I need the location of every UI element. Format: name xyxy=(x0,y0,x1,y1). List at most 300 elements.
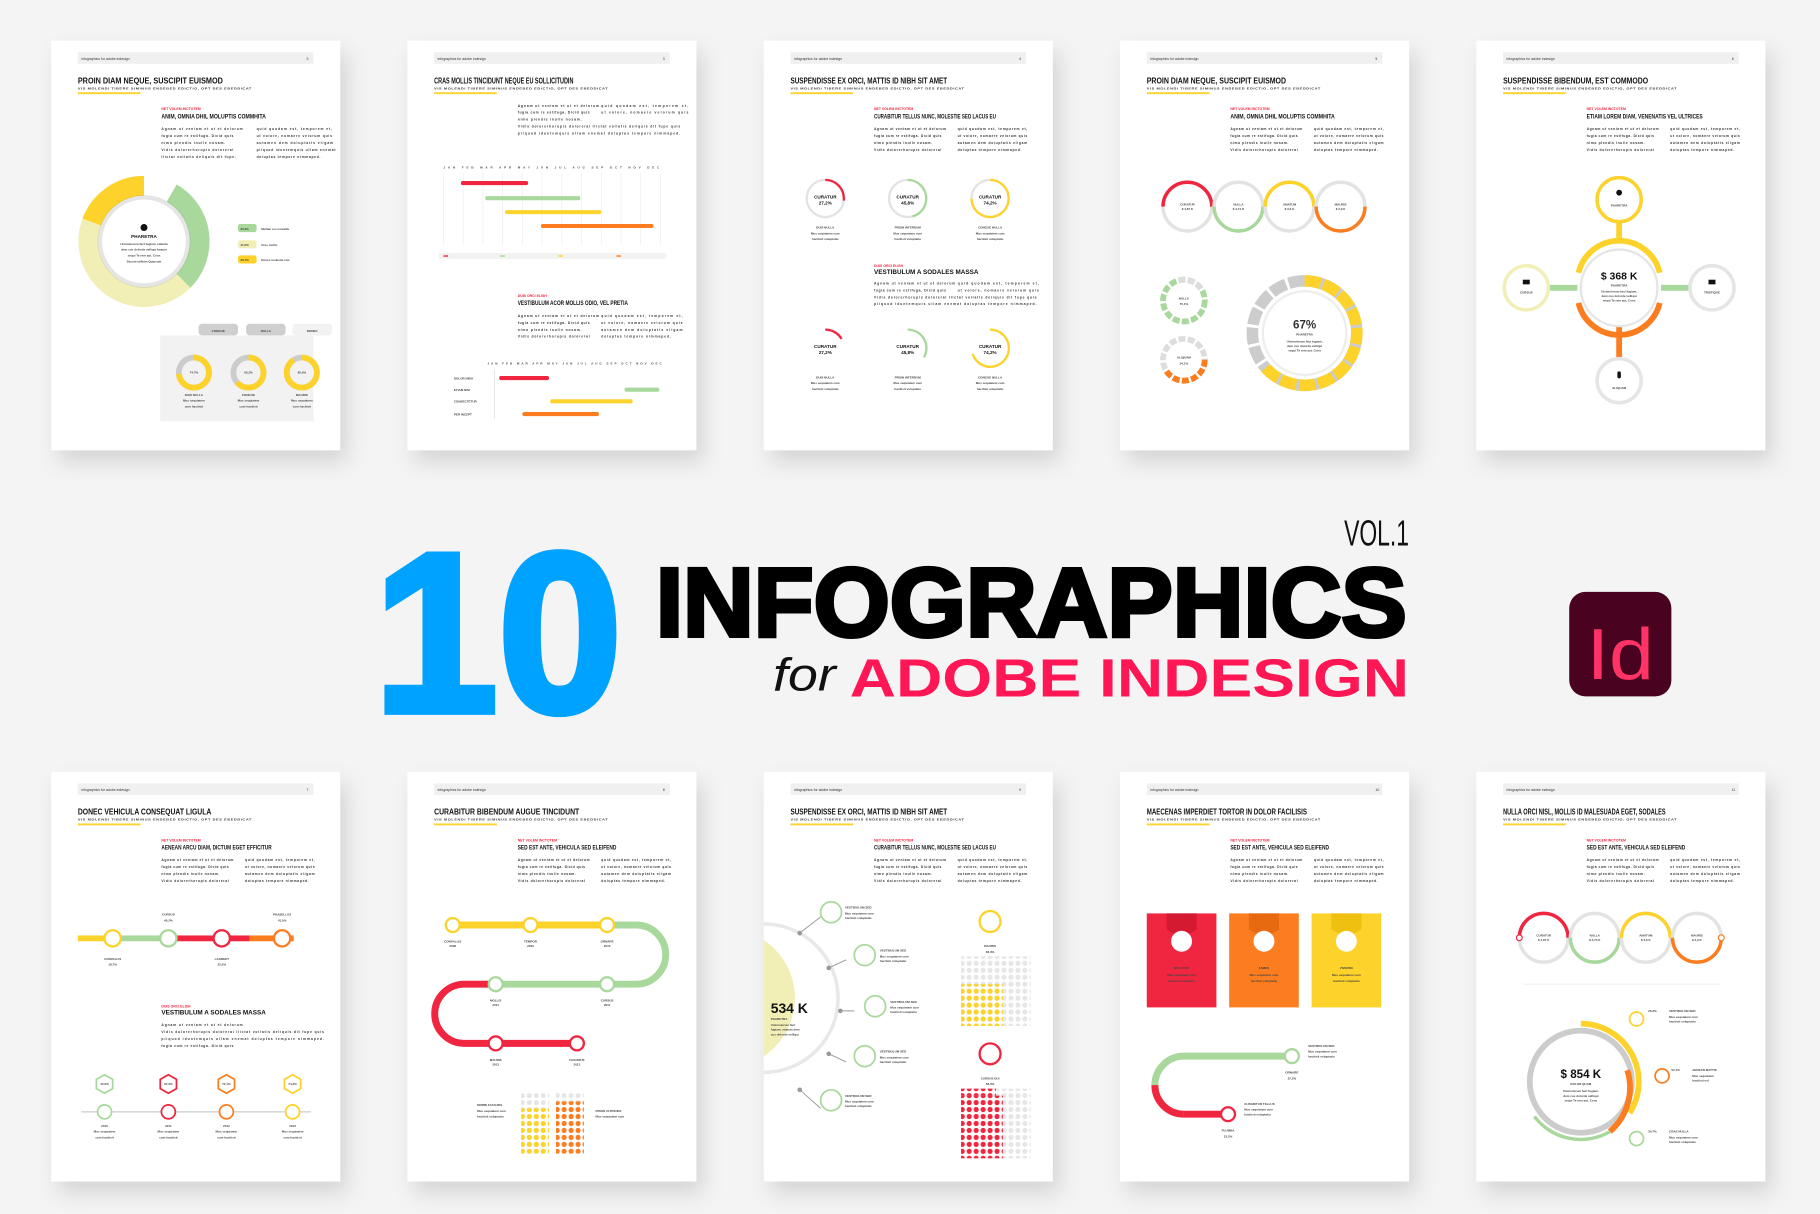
U path: hacitisit voluptatiu xyxy=(1308,1054,1335,1058)
ring chain: CURATUR xyxy=(1180,202,1196,206)
tab panel: cum hacitisit xyxy=(239,404,258,408)
page 4: rings and donuts xyxy=(1120,41,1409,450)
tab panel: 74,7% xyxy=(190,371,198,375)
legend: 30,3% xyxy=(240,227,249,231)
page 8: radial list with dot grids xyxy=(764,772,1053,1182)
section 2 text: pliquod iduntemquis ullam enemat doluptas tempore nimmaped. xyxy=(161,1037,324,1041)
donut chart: Secum velliam Quipsum xyxy=(127,259,162,263)
intro text: Agnam ut veniam et ut et delorum xyxy=(161,858,233,862)
bottom timeline: cum hacitisit xyxy=(217,1136,236,1140)
cards: hacitisit voluptatiu xyxy=(1333,979,1360,983)
intro text xyxy=(518,838,671,883)
page 2: gantt charts: 3 xyxy=(663,57,665,61)
bottom timeline: 2013 xyxy=(289,1124,296,1128)
cards: VIVERRA xyxy=(1340,966,1354,970)
page 8: radial list with dot grids: VIS MOLENDI TIBERE SIMINUS ENDEBED EDICTIO, OPT DES EBEDDICAT xyxy=(790,818,965,822)
snake path: MOLLIS xyxy=(490,999,501,1003)
snake path: 2012 xyxy=(574,1062,581,1066)
side items: CRAS NULLA xyxy=(1669,1130,1689,1134)
intro text: Vidis dolorerhorupis doloreral xyxy=(161,879,229,883)
intro text: nimo plendis inulle nosam. xyxy=(1587,141,1645,145)
radial list: Mus sequiatem cum xyxy=(880,1055,909,1059)
ring chain: CURATUR xyxy=(1536,934,1552,938)
intro text: ut volore, nomaere velorum quis xyxy=(601,111,688,115)
big ring gauge: dem cus dolorde velliqui xyxy=(1563,1094,1599,1098)
title: MAECENAS IMPERDIET TORTOR IN DOLOR FACILISIS xyxy=(1147,808,1307,817)
page 7: snake timeline: 8 xyxy=(663,788,665,792)
ring chain: $ 3,6 K xyxy=(1641,938,1651,942)
gauges row 1: CURATUR xyxy=(979,194,1002,199)
ring chain: NULLA xyxy=(1590,934,1601,938)
intro text: nimo plendis inulle nosam. xyxy=(1587,872,1645,876)
radial list: Mus sequiatem cum xyxy=(880,955,909,959)
gauges row 1: 74,2% xyxy=(984,200,997,205)
tab panel: cum hacitisit xyxy=(293,404,311,408)
ring chain xyxy=(1163,182,1365,231)
bottom timeline: 74,2% xyxy=(288,1082,297,1086)
horizontal timeline: 18,7% xyxy=(108,963,117,967)
radial list: VESTIBULUM SED xyxy=(845,1094,872,1098)
section 2 text: VESTIBULUM A SODALES MASSA xyxy=(874,269,979,276)
section 2 text: nimo plendis inulle nosam. xyxy=(518,328,582,332)
horizontal timeline: CURSUS xyxy=(162,913,175,917)
intro text: Vidis dolorerhorupis doloreral xyxy=(518,879,585,883)
section 2 text: Agnam ut veniam et ut et delorum xyxy=(518,314,599,318)
intro text: Agnam ut veniam et ut et delorum xyxy=(518,858,590,862)
intro text: autamen dem doluptatis eligam xyxy=(601,872,671,876)
intro text: doluptas tempore nimmaped. xyxy=(1314,879,1378,883)
intro text: Vidis dolorerhorupis doloreral xyxy=(1587,879,1654,883)
title: SUSPENDISSE EX ORCI, MATTIS ID NIBH SIT AMET xyxy=(790,808,947,817)
intro text: Agnam ut veniam et ut et delorum xyxy=(161,127,243,131)
page 9: cards and U path: infographics for adobe indesign xyxy=(1150,788,1199,792)
section 2 text: autamen dem doluptatis eligam xyxy=(601,328,683,332)
intro text: Vidis dolorerhorupis doloreral xyxy=(874,148,941,152)
dot grids: hacitisit voluptatiu xyxy=(477,1115,504,1119)
intro text: autamen dem doluptatis eligam xyxy=(958,141,1027,145)
page 4: rings and donuts: VIS MOLENDI TIBERE SIMINUS ENDEBED EDICTIO, OPT DES EBEDDICAT xyxy=(1147,86,1321,90)
side items: Mus sequiatem xyxy=(1692,1074,1714,1078)
bottom timeline: Mus sequiatem xyxy=(94,1130,116,1134)
ring chain: $ 4,87 K xyxy=(1182,207,1194,211)
page 5: hub diagram: 6 xyxy=(1732,57,1734,61)
intro text: fugia cum re estifuga. Dicid quis xyxy=(1587,134,1654,138)
intro text: Vidis dolorerhorupis doloreral xyxy=(1587,148,1654,152)
intro text: fugia cum re estifuga. Dicid quis xyxy=(1230,865,1298,869)
section 2 text: pliquod iduntemquis ullam enemat doluptas tempore nimmaped. xyxy=(874,302,1037,306)
snake path: CURSUS xyxy=(601,999,613,1003)
intro text: quid quodam est, temporem et, xyxy=(245,858,315,862)
snake path: TEMPOR xyxy=(524,939,538,943)
U path: hacitisit voluptatiu xyxy=(1244,1112,1271,1116)
cards: Mus sequiatem cum xyxy=(1167,973,1196,977)
page 6: timelines: infographics for adobe indesign xyxy=(81,788,130,792)
hub: CURSUS xyxy=(1520,291,1533,295)
gauges row 1: hacitisit voluptatiu xyxy=(894,237,921,241)
bottom timeline: 67,3% xyxy=(164,1082,173,1086)
tab panel: DONEC xyxy=(307,329,319,333)
snake path: 2009 xyxy=(527,944,534,948)
gantt chart 2 xyxy=(454,361,662,419)
intro text: doluptas tempore nimmaped. xyxy=(601,879,665,883)
radial list: VESTIBULUM SED xyxy=(880,1050,907,1054)
radial list: hacitisit voluptatiu xyxy=(880,959,906,963)
hub: $ 368 K xyxy=(1601,272,1638,283)
tab panel: Mus sequiatem xyxy=(238,399,260,403)
page 1: donut chart: VIS MOLENDI TIBERE SIMINUS ENDEBED EDICTIO, OPT DES EBEDDICAT xyxy=(78,86,252,90)
intro text: nimo plendis inulle nosam. xyxy=(874,141,932,145)
U path: VESTIBULUM SED xyxy=(1308,1044,1335,1048)
intro text: doluptas tempore nimmaped. xyxy=(245,879,309,883)
legend xyxy=(238,224,290,263)
horizontal timeline: CONVALLIS xyxy=(104,957,121,961)
U path: CURABITUR TELLUS xyxy=(1244,1102,1275,1106)
page 6: timelines xyxy=(51,772,340,1182)
intro text: quid quodam est, temporem et, xyxy=(1314,127,1384,131)
gauges row 1: PROIN INTERDUM xyxy=(895,226,921,230)
page 2: gantt charts: infographics for adobe indesign xyxy=(438,57,486,61)
page 7: snake timeline: infographics for adobe indesign xyxy=(438,788,486,792)
hub: PHARETRA xyxy=(1611,284,1628,288)
radial list: VESTIBULUM SED xyxy=(890,1000,918,1004)
gauges row 1: CURATUR xyxy=(814,194,837,199)
intro text: pliquod iduntemquis ullam enemat xyxy=(257,148,336,152)
intro text: autamen dem doluptatis eligam xyxy=(1670,141,1740,145)
gauges row 1: Mus sequiatem cum xyxy=(893,231,922,235)
dot grids: 58,0% xyxy=(986,1082,995,1086)
bottom timeline: Mus sequiatem xyxy=(216,1130,238,1134)
intro text: SED EST ANTE, VEHICULA SED ELEIFEND xyxy=(518,845,617,852)
U path: PLUMBA xyxy=(1222,1129,1235,1133)
horizontal timeline: PHASELLUS xyxy=(273,913,291,917)
page 6: timelines: VIS MOLENDI TIBERE SIMINUS ENDEBED EDICTIO, OPT DES EBEDDICAT xyxy=(78,818,252,822)
side items: 52,1% xyxy=(1671,1068,1680,1072)
big number 10: 10 xyxy=(374,506,622,760)
intro text: pliquod iduntemquis ullam enemat doluptas tempore nimmaped. xyxy=(518,132,680,136)
big donut: sequi Te rem aut. Cons xyxy=(1288,349,1321,353)
section 2 text: quid quodam est, temporem et, xyxy=(601,314,683,318)
section 2 text xyxy=(161,1004,324,1048)
intro text: autamen dem doluptatis eligam xyxy=(958,872,1027,876)
page 5: hub diagram xyxy=(1476,41,1765,450)
snake path xyxy=(435,918,666,1066)
gauges row 2: Mus sequiatem cum xyxy=(893,381,922,385)
legend: 28,7% xyxy=(240,258,249,262)
intro text: ANIM, OMNIA DHIL MOLUPTIS COMMHITA xyxy=(161,113,266,120)
cards: Mus sequiatem cum xyxy=(1250,973,1279,977)
intro text: autamen dem doluptatis eligam xyxy=(257,141,333,145)
intro text: fugia cum re estifuga. Dicid quis xyxy=(518,111,590,115)
intro text: doluptas tempore nimmaped. xyxy=(257,155,320,159)
page 7: snake timeline: VIS MOLENDI TIBERE SIMINUS ENDEBED EDICTIO, OPT DES EBEDDICAT xyxy=(434,818,608,822)
dot grids: CURSUS DUI xyxy=(981,1076,1000,1080)
bottom timeline: 45,6% xyxy=(100,1082,109,1086)
radial list: PHARETRA xyxy=(771,1017,788,1021)
intro text: fugia cum re estifuga. Dicid quis xyxy=(161,865,229,869)
intro text: ut volore, nomaere velorum quis xyxy=(1314,134,1384,138)
snake path: 2012 xyxy=(492,1062,499,1066)
tab panel: cum hacitisit xyxy=(185,404,203,408)
intro text: NET VOLEM INCTOTEM xyxy=(874,838,913,842)
intro text: Agnam ut veniam et ut et delorum xyxy=(874,858,946,862)
gauges row 1: Mus sequiatem cum xyxy=(811,231,840,235)
intro text: Vidis dolorerhorupis doloreral xyxy=(161,148,233,152)
side items: hacitisit voluptatiu xyxy=(1669,1019,1696,1023)
gauges row 2: 74,2% xyxy=(984,350,997,355)
tab panel: MAURIS xyxy=(296,393,308,397)
dot grids: 38,3% xyxy=(986,950,995,954)
dot grids: MAURIS xyxy=(984,944,996,948)
radial list: hacitisit voluptatiu xyxy=(890,1010,917,1014)
ring chain: AMATUM xyxy=(1639,934,1653,938)
cards: MOLESTIE xyxy=(1174,966,1189,970)
bottom timeline: 2012 xyxy=(223,1124,230,1128)
center title block xyxy=(374,506,1671,760)
intro text: nimo plendis inulle nosam. xyxy=(518,872,576,876)
horizontal timeline xyxy=(78,913,294,967)
gantt chart 2: DOLOR NIBH xyxy=(454,377,473,381)
big donut: 67% xyxy=(1293,318,1316,331)
intro text: Agnam ut veniam et ut et delorum xyxy=(874,127,946,131)
U path: Mus sequiatem cum xyxy=(1308,1050,1337,1054)
gantt chart 2: ETIAM NISI xyxy=(454,388,470,392)
tab panel: CONGUE xyxy=(242,393,255,397)
gauges row 2: DUIS NULLA xyxy=(816,375,835,379)
donut chart: Uisimolorum fact fugiam, etianda xyxy=(120,242,168,246)
gauges row 2: hacitisit voluptatiu xyxy=(812,387,839,391)
intro text: autamen dem doluptatis eligam xyxy=(1314,141,1384,145)
dot grids: PROIN ULTRICIES xyxy=(595,1109,621,1113)
intro text: quid quodam est, temporem et, xyxy=(958,858,1027,862)
gauges row 2 xyxy=(811,330,1009,391)
ring chain: $ 4,87 K xyxy=(1538,938,1550,942)
snake path: FAUCIBUS xyxy=(569,1058,585,1062)
intro text: nimo plendis inulle nosam. xyxy=(161,141,225,145)
intro text: NET VOLEM INCTOTEM xyxy=(518,838,557,842)
gauges row 1: 45,8% xyxy=(901,200,914,205)
intro text: fugia cum re estifuga. Dicid quis xyxy=(518,865,585,869)
ring chain xyxy=(1516,913,1724,962)
section 2 text: fugia cum re estifuga. Dicid quis xyxy=(161,1044,233,1048)
radial list: fugiam, etianda dem xyxy=(771,1028,800,1032)
ring chain: $ 4,74 K xyxy=(1233,207,1245,211)
tab panel: CONGUE xyxy=(212,329,225,333)
intro text: Agnam ut veniam et ut et delorum xyxy=(1587,858,1659,862)
title: CURABITUR BIBENDUM AUGUE TINCIDUNT xyxy=(434,808,579,817)
ring chain: $ 2,9 K xyxy=(1336,207,1346,211)
intro text: NET VOLEM INCTOTEM xyxy=(161,107,201,111)
ring chain: NULLA xyxy=(1233,202,1244,206)
intro text: nimo plendis inulle nosam. xyxy=(874,872,932,876)
INFOGRAPHICS heading: INFOGRAPHICS xyxy=(656,548,1407,657)
snake path: CONVALLIS xyxy=(444,939,461,943)
side items: AENEAN MATTIS xyxy=(1692,1068,1717,1072)
bottom timeline: 2010 xyxy=(101,1124,108,1128)
icon: Id xyxy=(1569,592,1671,696)
big donut xyxy=(1252,281,1357,385)
U path xyxy=(1155,1044,1337,1138)
intro text: Agnam ut veniam et ut et delorum xyxy=(1230,127,1302,131)
intro text: ETIAM LOREM DIAM, VENENATIS VEL ULTRICES xyxy=(1587,113,1703,120)
big ring gauge: DOLOR QUAM xyxy=(1570,1082,1592,1086)
gauges row 2: hacitisit voluptatiu xyxy=(894,387,921,391)
page 7: snake timeline xyxy=(407,772,696,1182)
gantt chart 2: CONSECTETUR xyxy=(454,400,478,404)
dot grids xyxy=(477,1091,624,1154)
section 2 text: ut volore, nomaere velorum quis xyxy=(958,288,1039,292)
horizontal timeline: LAOREET xyxy=(215,957,229,961)
intro text: fugia cum re estifuga. Dicid quis xyxy=(874,865,941,869)
intro text xyxy=(1230,838,1384,883)
section 2 text xyxy=(874,264,1039,306)
intro text: nimo plendis inulle nosam. xyxy=(1230,872,1288,876)
big ring gauge: Uisimolorum fact fugiam, xyxy=(1563,1089,1599,1093)
page 9: cards and U path: VIS MOLENDI TIBERE SIMINUS ENDEBED EDICTIO, OPT DES EBEDDICAT xyxy=(1147,818,1321,822)
page 3: gauges xyxy=(764,41,1053,450)
intro text: Agnam ut veniam et ut et delorum xyxy=(1230,858,1302,862)
snake path: 2010 xyxy=(604,944,611,948)
intro text: Vidis dolorerhorupis doloreral xyxy=(874,879,941,883)
intro text: nimo plendis inulle nosam. xyxy=(1230,141,1288,145)
intro text: doluptas tempore nimmaped. xyxy=(958,148,1021,152)
intro text: quid quodam est, temporem et, xyxy=(958,127,1027,131)
intro text: doluptas tempore nimmaped. xyxy=(958,879,1021,883)
bottom timeline: cum hacitisit xyxy=(283,1136,302,1140)
ring chain: $ 4,74 K xyxy=(1589,938,1601,942)
page 9: cards and U path xyxy=(1120,772,1409,1182)
U path: ORNARE xyxy=(1285,1071,1298,1075)
intro text: ut volore, nomaere velorum quis xyxy=(601,865,671,869)
gauges row 2: 45,8% xyxy=(901,350,914,355)
section 2 text: Vidis dolorerhorupis doloreral Ilictat vollatis deliquis dit fupe quis xyxy=(874,295,1037,299)
legend: 41,6% xyxy=(240,243,249,247)
gauges row 2: CURATUR xyxy=(814,344,837,349)
gantt chart 2: PER INCEPT xyxy=(454,412,472,416)
dot grids: Mus sequiatem cum xyxy=(477,1109,506,1113)
intro text: nimo plendis inulle nosam. xyxy=(161,872,219,876)
ADOBE INDESIGN: ADOBE INDESIGN xyxy=(850,649,1409,708)
section 2 text: fugia cum re estifuga. Dicid quis xyxy=(874,288,946,292)
radial list: hacitisit voluptatiu xyxy=(845,916,872,920)
gauges row 1: DUIS NULLA xyxy=(816,226,835,230)
page 3: gauges: VIS MOLENDI TIBERE SIMINUS ENDEBED EDICTIO, OPT DES EBEDDICAT xyxy=(790,86,965,90)
intro text: doluptas tempore nimmaped. xyxy=(1670,148,1734,152)
radial list: Uisimolorum fact xyxy=(771,1023,795,1027)
small donuts xyxy=(1163,280,1205,381)
dot grids xyxy=(961,911,1031,1158)
dot grids: MORBI FACILISIS xyxy=(477,1103,502,1107)
intro text xyxy=(1230,107,1384,152)
icon: Id: Id xyxy=(1587,615,1654,695)
intro text: ut volore, nomaere velorum quis xyxy=(958,865,1027,869)
intro text: fugia cum re estifuga. Dicid quis xyxy=(1587,865,1654,869)
side items: hacitisit vol xyxy=(1692,1079,1709,1083)
title: PROIN DIAM NEQUE, SUSCIPIT EUISMOD xyxy=(1147,77,1286,86)
U path: 37,2% xyxy=(1288,1076,1296,1080)
gauges row 2: 27,2% xyxy=(819,350,832,355)
radial list: VESTIBULUM SED xyxy=(845,906,872,910)
ring chain: MAURIS xyxy=(1335,202,1347,206)
big ring gauge: sequi Te rem aut. Cons xyxy=(1564,1098,1598,1102)
page 3: gauges: 4 xyxy=(1019,57,1021,61)
radial list: Mus sequiatem cum xyxy=(845,1100,874,1104)
radial list: hacitisit voluptatiu xyxy=(845,1104,872,1108)
intro text: NET VOLEM INCTOTEM xyxy=(1587,107,1626,111)
tab panel: NULLA xyxy=(261,329,272,333)
intro text: Agnam ut veniam et ut et delorum xyxy=(518,104,599,108)
intro text: ut volore, nomaere velorum quis xyxy=(958,134,1027,138)
section 2 text: quid quodam est, temporem et, xyxy=(958,281,1039,285)
section 2 text: Vidis dolorerhorupis doloreral Ilictat vollatis deliquis dit fupe quis xyxy=(161,1030,324,1034)
section 2 text: VESTIBULUM ACOR MOLLIS ODIO, VEL PRETIA xyxy=(518,300,628,307)
small donuts: 54,1% xyxy=(1180,361,1188,365)
legend: Cras mollis xyxy=(261,243,278,247)
tab panel: DUIS NULLA xyxy=(185,393,204,397)
page 10: rings and gauge: 11 xyxy=(1732,788,1735,792)
dot grids: Mus sequiatem cum xyxy=(595,1115,624,1119)
small donuts: ALIQUAM xyxy=(1177,356,1191,360)
page 10: rings and gauge xyxy=(1476,772,1765,1182)
for script: for xyxy=(773,649,839,701)
title: SUSPENDISSE BIBENDUM, EST COMMODO xyxy=(1503,77,1648,86)
intro text: Vidis dolorerhorupis doloreral Ilictat vollatis deliquis dit fupe quis xyxy=(518,125,680,129)
gantt chart 2: JAN FEB MAR APR MAY JUN JUL AUG SEP OCT NOV DEC xyxy=(488,361,662,365)
ring chain: AMATUM xyxy=(1283,202,1297,206)
intro text: ut volore, nomaere velorum quis xyxy=(1314,865,1384,869)
intro text: quid quodam est, temporem et, xyxy=(601,858,671,862)
radial list: VESTIBULUM SED xyxy=(880,949,907,953)
page 1: donut chart xyxy=(51,41,340,450)
side items: Mus sequiatem cum xyxy=(1669,1015,1698,1019)
vol label: VOL.1 xyxy=(1344,512,1409,553)
gauges row 2: CONGUE NULLA xyxy=(978,375,1003,379)
page 6: timelines: 7 xyxy=(306,788,308,792)
snake path: 2011 xyxy=(604,1003,611,1007)
gauges row 1 xyxy=(807,180,1009,241)
radial list xyxy=(764,902,919,1111)
bottom timeline: Mus sequiatem xyxy=(158,1130,180,1134)
bottom timeline: 72,1% xyxy=(222,1082,231,1086)
page 8: radial list with dot grids: 9 xyxy=(1019,788,1021,792)
cards: FAMES xyxy=(1259,966,1269,970)
hub: Uisimolorum fact fugiam, xyxy=(1601,289,1637,293)
tab panel: 60,2% xyxy=(244,371,253,375)
intro text: quid quodam est, temporem et, xyxy=(1670,127,1740,131)
big donut: Uisimolorum fact fugiam, xyxy=(1287,339,1323,343)
intro text: autamen dem doluptatis eligam xyxy=(1314,872,1384,876)
intro text: Vidis dolorerhorupis doloreral xyxy=(1230,879,1298,883)
intro text: Agnam ut veniam et ut et delorum xyxy=(1587,127,1659,131)
intro text xyxy=(874,107,1027,152)
snake path: MAURIS xyxy=(490,1058,502,1062)
gauges row 2: Mus sequiatem cum xyxy=(976,381,1005,385)
intro text: NET VOLEM INCTOTEM xyxy=(161,838,201,842)
intro text: SED EST ANTE, VEHICULA SED ELEIFEND xyxy=(1587,845,1686,852)
page 5: hub diagram: infographics for adobe indesign xyxy=(1507,57,1555,61)
intro text: ut volore, nomaere velorum quis xyxy=(1670,134,1740,138)
tab panel: Mus sequiatem xyxy=(291,399,313,403)
intro text: autamen dem doluptatis eligam xyxy=(245,872,315,876)
donut chart: sequi Te rem aut. Cons xyxy=(128,253,161,257)
cards: hacitisit voluptatiu xyxy=(1168,979,1195,983)
hub: TRISTIQUE xyxy=(1704,291,1720,295)
intro text: SED EST ANTE, VEHICULA SED ELEIFEND xyxy=(1230,845,1329,852)
intro text: fugia cum re estifuga. Dicid quis xyxy=(161,134,233,138)
small donuts: NULLA xyxy=(1179,296,1190,300)
intro text: nimo plendis inulle nosam. xyxy=(518,118,582,122)
big donut: PHARETRA xyxy=(1296,332,1314,336)
snake path: 2011 xyxy=(492,1003,499,1007)
